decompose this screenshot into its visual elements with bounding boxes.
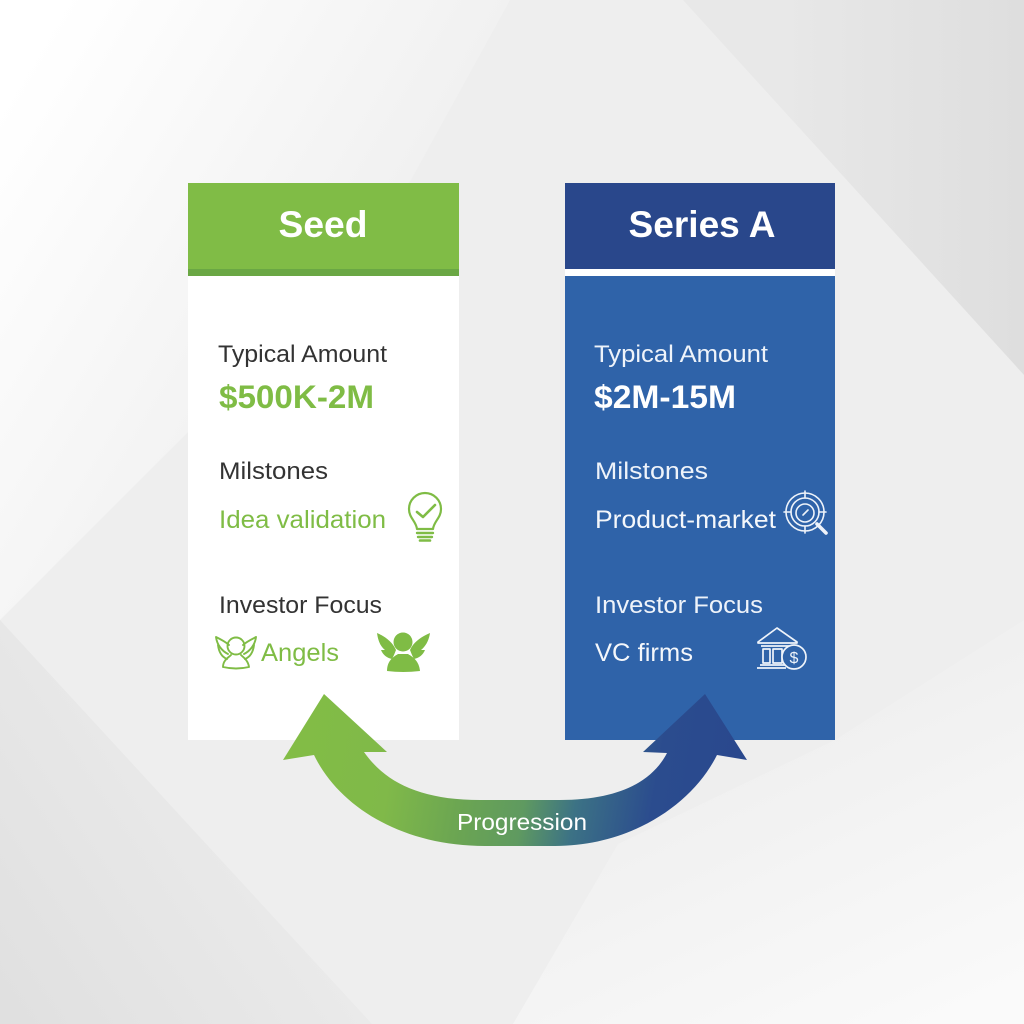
arrow: progression (283, 694, 747, 846)
text: idea validation: Idea validation (219, 506, 386, 534)
text: progression label: Progression (457, 809, 587, 835)
icon: angel outline (216, 637, 256, 668)
panel: Series A (565, 183, 835, 740)
text: typical amount label: Typical Amount (594, 341, 768, 368)
text: angels: Angels (261, 639, 339, 667)
icon: light bulb with check (409, 493, 441, 540)
text: milestones label: Milstones (595, 458, 708, 485)
text: product-market: Product-market (595, 506, 776, 534)
icon: bank with dollar coin (757, 628, 806, 669)
header: Seed (188, 183, 459, 276)
text: investor focus label: Investor Focus (219, 592, 382, 619)
header: Series A: Series A (628, 204, 776, 245)
icon: angel solid (377, 632, 430, 672)
header: Series A (565, 183, 835, 276)
text: series A amount: $2M-15M (594, 379, 736, 415)
text: seed amount: $500K-2M (219, 379, 374, 415)
header: Seed: Seed (278, 204, 368, 245)
text: investor focus label: Investor Focus (595, 592, 763, 619)
card body: Seed (188, 276, 459, 740)
icon: bank with dollar coin: $ (790, 650, 799, 667)
text: milestones label: Milstones (219, 458, 328, 485)
panel: Seed (188, 183, 459, 740)
card body: Series A (565, 276, 835, 740)
text: VC firms: VC firms (595, 639, 693, 667)
text: typical amount label: Typical Amount (218, 341, 387, 368)
icon: target with magnifier (784, 491, 826, 533)
